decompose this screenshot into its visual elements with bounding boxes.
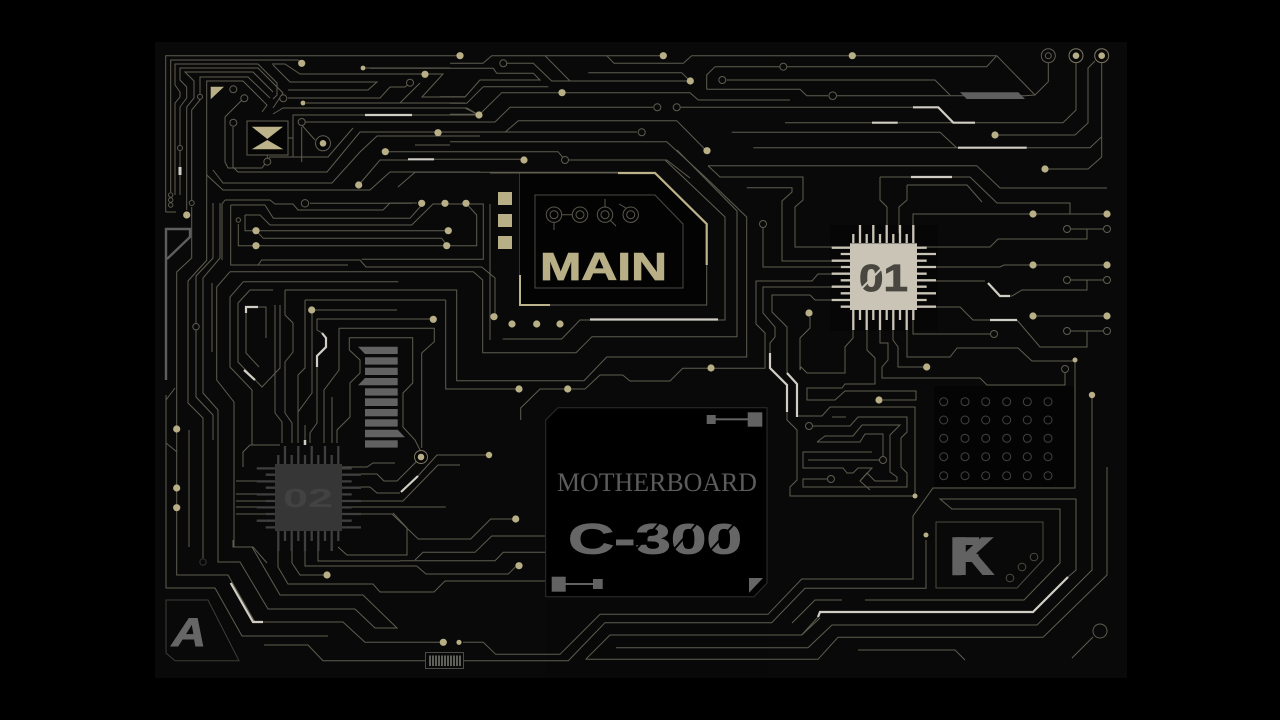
- icon: corner triangle: [749, 578, 763, 593]
- white trace highlights: [180, 107, 1068, 622]
- ring terminals: [316, 49, 1109, 463]
- emblem: A: A: [171, 611, 206, 655]
- chip 02: [257, 446, 361, 551]
- gray parallelogram: [960, 92, 1025, 99]
- gold solder dots: [173, 52, 1111, 646]
- chip 02 label: 02: [283, 483, 333, 513]
- traces: bottom right: [586, 398, 1107, 660]
- panel: FK logo: [936, 522, 1043, 588]
- circuit board background: [155, 42, 1127, 678]
- chip 01 label: 01: [859, 258, 908, 300]
- main inner outline: [535, 195, 683, 288]
- icon: bottom connector: [552, 577, 603, 592]
- hollow via circles: [168, 60, 1110, 638]
- dot grid panel: [940, 398, 1052, 480]
- gray stacked bars: [358, 347, 405, 448]
- heading: motherboard: MOTHERBOARD: [557, 468, 757, 497]
- traces: maze block: [787, 405, 915, 496]
- traces: top middle: [440, 56, 1107, 261]
- traces: around main panel: [230, 150, 747, 389]
- model name: [568, 516, 742, 564]
- small logo circles: [1006, 553, 1038, 582]
- icon: gold corner triangle: [211, 87, 224, 99]
- panel: motherboard C-300: [546, 408, 767, 597]
- traces: top left corner: [166, 56, 653, 642]
- main title: MAIN: [540, 246, 667, 289]
- logo mark: FK: F: [950, 528, 980, 586]
- traces: top right: [732, 56, 1107, 361]
- icon: three gold squares: [498, 192, 512, 249]
- traces: above chip 02: [166, 272, 434, 636]
- panel: main: [520, 173, 707, 305]
- traces: around chip 02: [218, 360, 1075, 661]
- icon: top connector: [707, 412, 762, 427]
- gray flag marker: [166, 229, 190, 380]
- logo mark: FK: K: [953, 528, 993, 586]
- icon: hourglass box: [247, 121, 288, 155]
- connector: bottom port: [426, 652, 464, 668]
- model name: C-300: [568, 516, 742, 564]
- chip 01: [832, 225, 936, 330]
- traces: left of chip 01: [521, 228, 1065, 420]
- box: letter A emblem frame: [166, 600, 239, 661]
- main indicator circles: [546, 199, 638, 230]
